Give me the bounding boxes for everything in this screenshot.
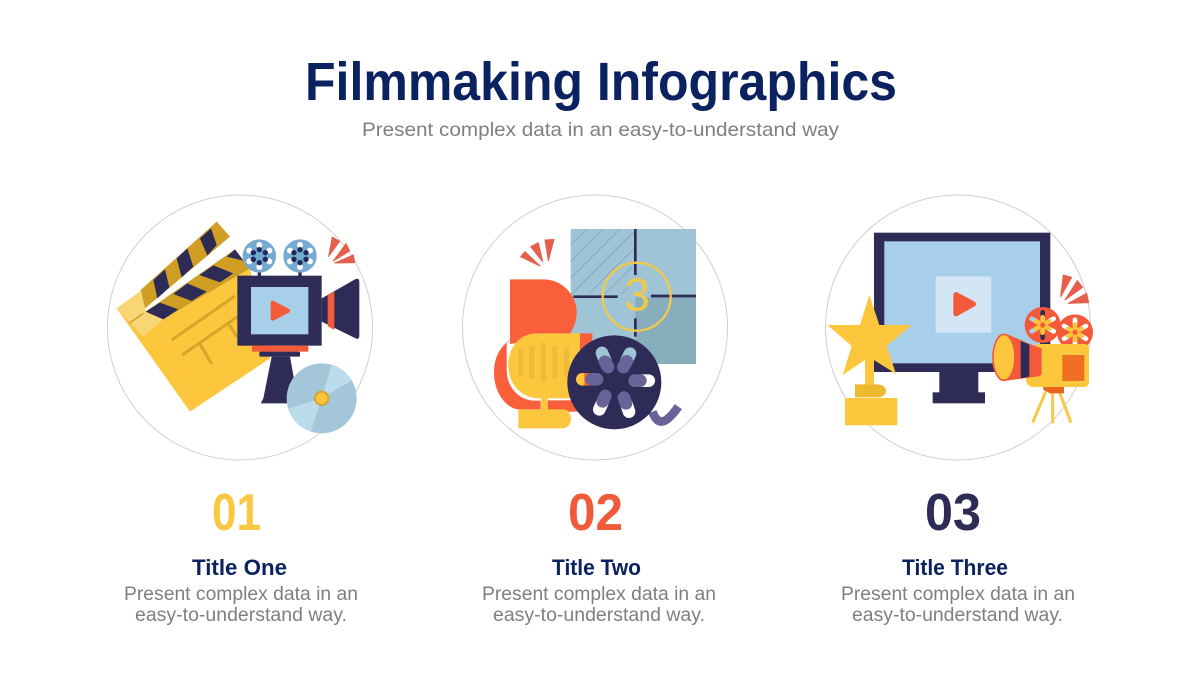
text block one: [124, 584, 358, 626]
icon: monitor: [874, 233, 1050, 403]
icon: clapperboard and camera: [117, 222, 359, 433]
text block three: [841, 584, 1075, 626]
number 02: 02: [568, 484, 623, 542]
subtitle: Present complex data in an easy-to-understand way: [362, 119, 839, 141]
text block three: Present complex data in an: [841, 584, 1075, 605]
panel: step three: [826, 195, 1093, 626]
icon: burst: [521, 239, 554, 266]
circle outline three: [826, 195, 1090, 460]
icon: trophy: [827, 295, 912, 425]
countdown number: 3: [624, 269, 650, 321]
circle outline two: [462, 195, 728, 460]
icon: microphone: [494, 279, 592, 428]
heading: title three: Title Three: [902, 555, 1008, 580]
number 01: 01: [212, 484, 261, 542]
clapperboard: [117, 222, 270, 412]
text block one: easy-to-understand way.: [135, 605, 347, 626]
icon: monitor, trophy and projector: [827, 233, 1093, 425]
text block two: easy-to-understand way.: [493, 605, 705, 626]
icon: disc: [287, 363, 357, 433]
icon: film reel: [567, 335, 661, 429]
text block two: Present complex data in an: [482, 584, 716, 605]
heading: title one: Title One: [192, 555, 287, 580]
icon: burst: [1061, 275, 1089, 303]
heading: title two: Title Two: [552, 555, 641, 580]
icon: burst: [329, 237, 355, 263]
film countdown frame: [571, 229, 696, 364]
panel: step two: [462, 195, 728, 626]
number 03: 03: [925, 484, 981, 542]
title: Filmmaking Infographics: [305, 52, 897, 112]
film camera: [237, 239, 359, 403]
panel: step one: [108, 195, 372, 626]
icon: projector: [993, 307, 1093, 423]
icon: film tail: [652, 407, 678, 422]
icon: film countdown, microphone and reel: [494, 229, 696, 429]
text block two: [482, 584, 716, 626]
text block one: Present complex data in an: [124, 584, 358, 605]
circle outline one: [108, 195, 372, 460]
text block three: easy-to-understand way.: [852, 605, 1063, 626]
